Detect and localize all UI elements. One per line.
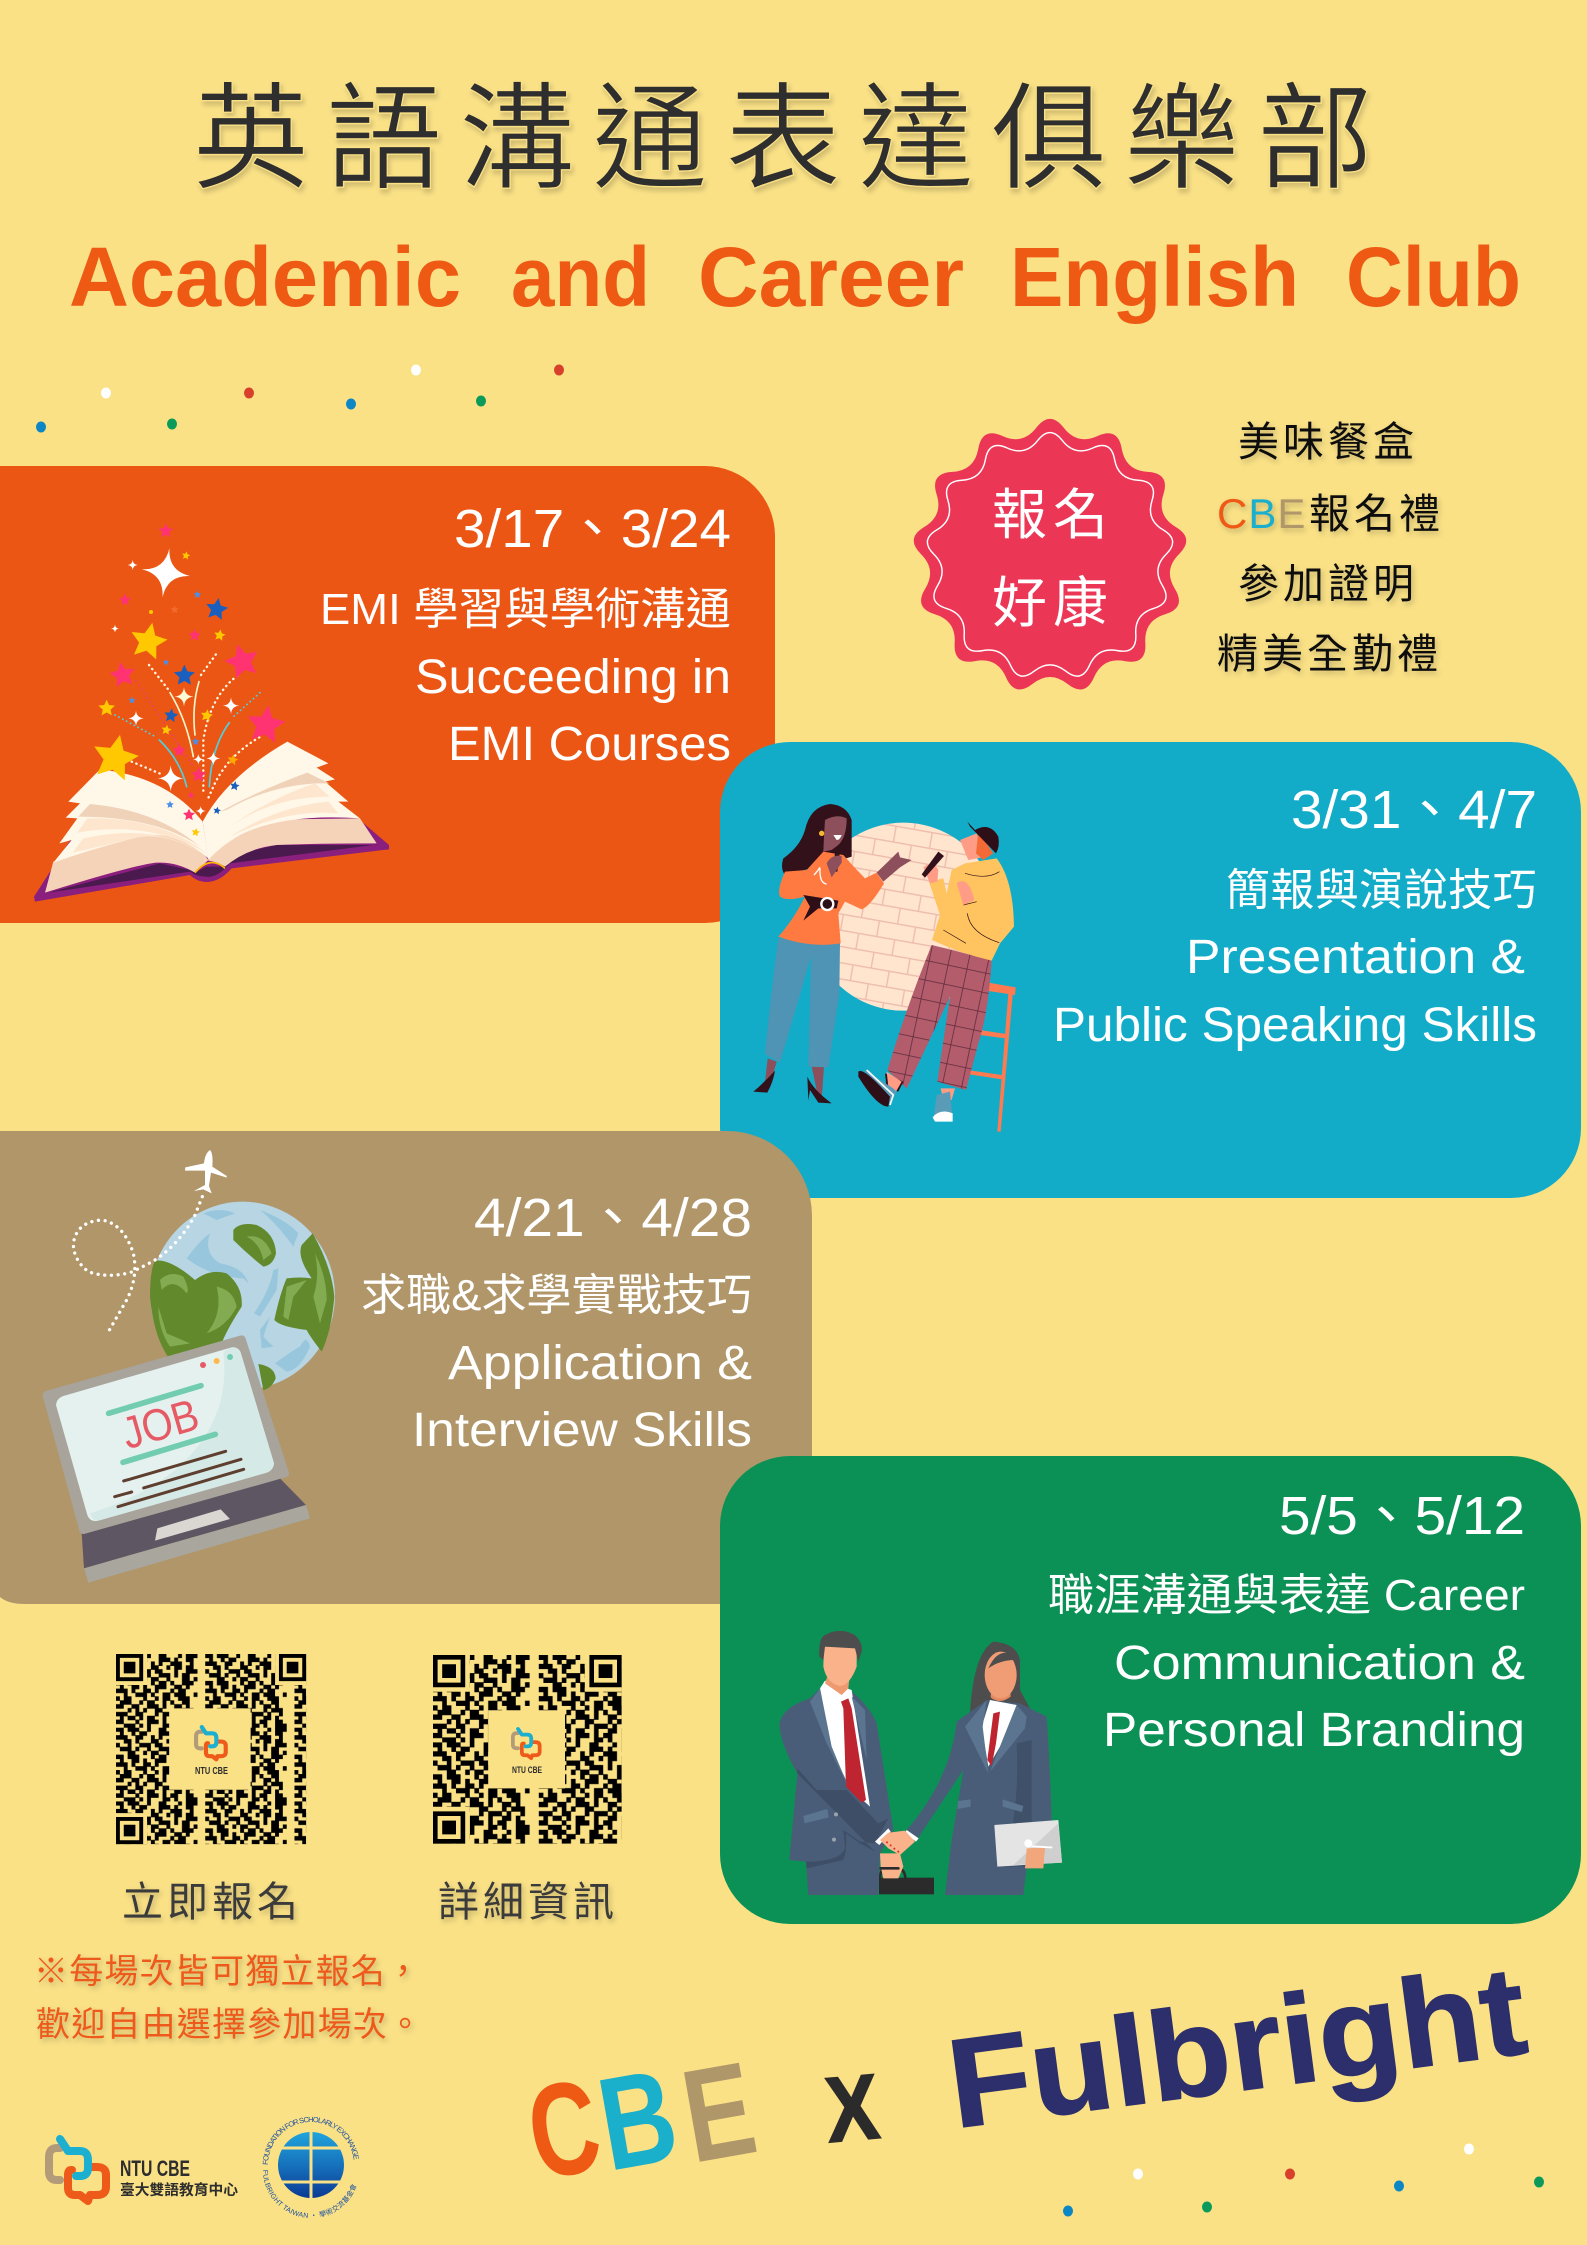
subtitle 1 zh: EMI 學習與學術溝通: [320, 585, 731, 634]
subtitle 3 en line 1: Application &: [448, 1337, 752, 1390]
illustration: globe, plane and job laptop: [47, 1150, 335, 1583]
note: registration notice: 歡迎自由選擇參加場次。: [36, 2006, 423, 2044]
subtitle 4 line 1: 職涯溝通與表達 Career: [1048, 1571, 1525, 1620]
heading: CBE: B: [588, 2042, 687, 2200]
list: perks: CBE: [1217, 490, 1306, 537]
subtitle 2 zh: 簡報與演說技巧: [1226, 866, 1537, 915]
date 3: 4/21、4/28: [474, 1188, 752, 1248]
heading: CBE: E: [672, 2035, 766, 2192]
title: English: Club: [1346, 230, 1521, 324]
logo: NTU CBE: 臺大雙語教育中心: [120, 2181, 239, 2199]
panel: session 4 career: [720, 1456, 1581, 1924]
logo: Fulbright Taiwan seal: [262, 2116, 359, 2218]
list: perks: 參加證明: [1238, 561, 1418, 607]
illustration: two people with microphones: [753, 804, 1016, 1132]
illustration: two business people shaking hands: [779, 1631, 1062, 1895]
subtitle 4 line 2: Communication &: [1114, 1637, 1525, 1690]
list: perks: 精美全勤禮: [1217, 631, 1442, 677]
title: Chinese: 英語溝通表達俱樂部: [193, 74, 1390, 204]
title: English: English: [1010, 230, 1299, 324]
QR code: registration: [116, 1654, 306, 1844]
panel: session 1 EMI: [0, 466, 775, 923]
title: English: Career: [698, 230, 964, 324]
list: perks: 美味餐盒: [1238, 419, 1418, 465]
subtitle 1 en line 2: EMI Courses: [448, 718, 731, 771]
logo: NTU CBE: [49, 2139, 239, 2201]
list: perks: [1217, 419, 1444, 677]
illustration: open book with stars: [34, 523, 389, 902]
date 1: 3/17、3/24: [454, 499, 731, 559]
heading: cross mark: X: [822, 2056, 883, 2162]
confetti dots: top: [36, 364, 564, 432]
heading: CBE: C: [517, 2052, 611, 2208]
subtitle 2 en line 1: Presentation &: [1186, 931, 1525, 984]
logo: NTU CBE: NTU CBE: [120, 2156, 190, 2181]
title: English: and: [511, 230, 650, 324]
title: English: Academic: [69, 230, 461, 324]
heading: Fulbright: Fulbright: [940, 1939, 1534, 2155]
icon: NTU CBE mark in second QR: NTU CBE: [512, 1765, 542, 1776]
confetti dots: bottom: [1063, 2144, 1544, 2216]
icon: NTU CBE mark in second QR: [512, 1729, 542, 1776]
note: registration notice: ※每場次皆可獨立報名，: [34, 1953, 421, 1991]
icon: NTU CBE mark in first QR: [195, 1727, 228, 1777]
note: registration notice: [34, 1953, 423, 2044]
badge: registration perks: 好康: [992, 572, 1114, 634]
panel: session 3 application: [0, 1131, 812, 1604]
subtitle 3 zh: 求職&求學實戰技巧: [361, 1271, 752, 1320]
subtitle 1 en line 1: Succeeding in: [415, 651, 731, 704]
illustration: globe, plane and job laptop: JOB: [116, 1389, 204, 1459]
title: English: [69, 230, 1521, 324]
heading: CBE: [517, 2035, 766, 2208]
QR code: details: [433, 1655, 622, 1844]
label: register now: 立即報名: [122, 1879, 302, 1925]
label: details: 詳細資訊: [438, 1879, 618, 1925]
badge: registration perks: [914, 419, 1186, 689]
panel: session 2 presentation: [720, 742, 1581, 1198]
date 2: 3/31、4/7: [1291, 780, 1537, 840]
logo: Fulbright Taiwan seal: FOUNDATION FOR SCHOLARLY EXCHANGE: [262, 2116, 359, 2164]
subtitle 2 en line 2: Public Speaking Skills: [1053, 999, 1537, 1052]
list: perks: 報名禮: [1309, 491, 1444, 537]
icon: NTU CBE mark in first QR: NTU CBE: [195, 1766, 228, 1777]
badge: registration perks: 報名: [992, 484, 1114, 546]
subtitle 3 en line 2: Interview Skills: [412, 1404, 752, 1457]
subtitle 4 line 3: Personal Branding: [1103, 1704, 1525, 1757]
date 4: 5/5、5/12: [1279, 1486, 1525, 1546]
logo: Fulbright Taiwan seal: FULBRIGHT TAIWAN ‧ 學術交流基金會: [263, 2170, 356, 2218]
